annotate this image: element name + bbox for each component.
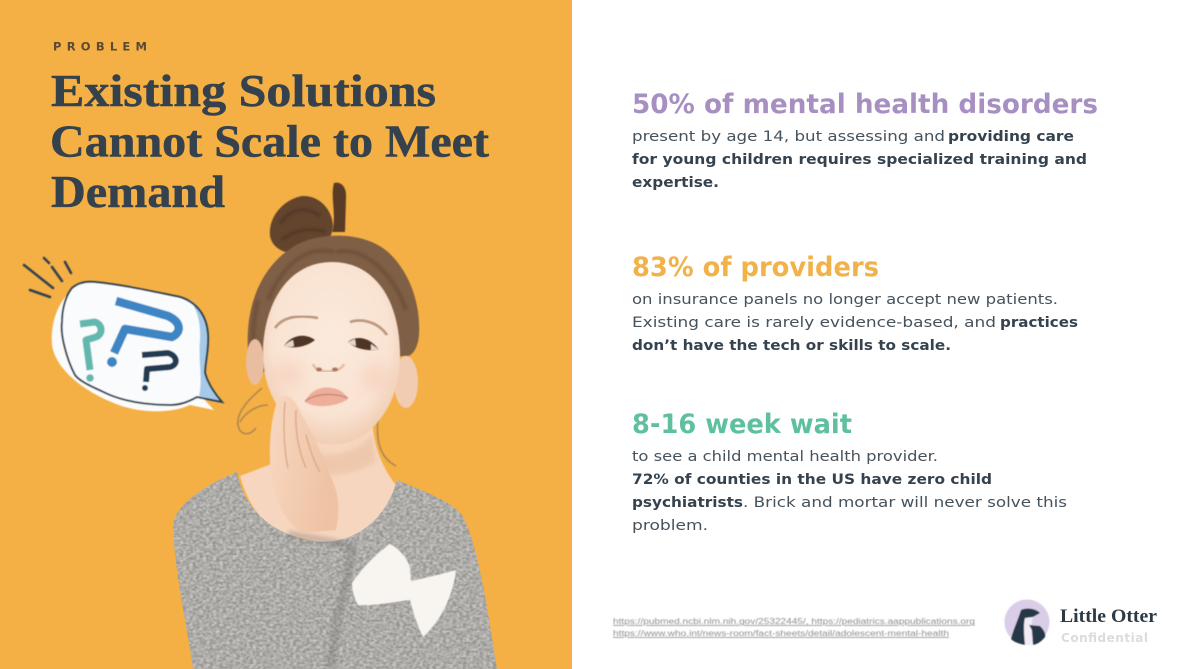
stat heading: 50% of mental health disorders (632, 89, 1098, 120)
label: PROBLEM: PROBLEM (53, 40, 147, 54)
bow (352, 544, 456, 637)
sleeve shading (288, 534, 353, 669)
stat body: . Brick and mortar will never solve this (743, 495, 1067, 511)
stat body: 72% of counties in the US have zero child (632, 472, 992, 488)
icon: otter (1004, 600, 1050, 645)
source links: https://pubmed.ncbi.nlm.nih.gov/25322445/, https://pediatrics.aappublications.org (613, 617, 975, 626)
stat body: expertise. (632, 175, 719, 191)
stat heading: 83% of providers (632, 252, 879, 283)
brand name: Little Otter (1060, 607, 1157, 627)
stat body: providing care (948, 129, 1074, 145)
stat body: Existing care is rarely evidence-based, and (632, 315, 996, 331)
title (50, 65, 490, 217)
back wisps of hair (238, 388, 396, 466)
confidential note: Confidential (1061, 631, 1148, 645)
title: Demand (51, 166, 225, 217)
stat body: don’t have the tech or skills to scale. (632, 338, 951, 354)
stat body: problem. (632, 518, 708, 534)
bubble fill (62, 282, 222, 405)
question mark teal (80, 322, 101, 382)
panel: stat wait (632, 409, 1067, 534)
bubble outline (62, 282, 222, 405)
source links: https://www.who.int/news-room/fact-sheets/detail/adolescent-mental-health (613, 629, 949, 638)
bubble white backing (52, 285, 214, 411)
eyes (284, 336, 379, 350)
ears (246, 339, 418, 408)
logo: Little Otter (1004, 600, 1157, 645)
neck and chest (240, 420, 398, 547)
stat body: present by age 14, but assessing and (632, 129, 945, 145)
icon: speech bubble with question marks (24, 258, 222, 411)
stat body (632, 292, 1078, 354)
nose (313, 364, 344, 372)
action lines (24, 258, 71, 297)
hand (270, 395, 338, 533)
stat body: psychiatrists (632, 495, 743, 511)
cheek blush (272, 361, 392, 392)
bubble shade (190, 300, 220, 401)
panel: stat 50% (632, 89, 1098, 191)
stat body (632, 449, 1067, 534)
stat body: practices (1000, 315, 1078, 331)
title: Cannot Scale to Meet (50, 116, 490, 166)
face (263, 262, 400, 444)
stat heading: 8-16 week wait (632, 409, 852, 440)
stat body (632, 129, 1087, 191)
hair (248, 183, 419, 372)
source links (613, 617, 975, 638)
question mark dark (142, 353, 176, 391)
stat body: on insurance panels no longer accept new patients. (632, 292, 1058, 308)
stat body: to see a child mental health provider. (632, 449, 938, 465)
sweater (173, 472, 497, 669)
photo: girl with hand on cheek (173, 183, 497, 669)
neck shadow (300, 435, 376, 475)
eyebrows (275, 316, 387, 335)
title: Existing Solutions (51, 65, 436, 116)
panel: stat 83% (632, 252, 1078, 354)
stat body: for young children requires specialized training and (632, 152, 1087, 168)
mouth (305, 388, 348, 406)
question mark blue (107, 301, 179, 367)
panel: orange left background (0, 0, 572, 669)
